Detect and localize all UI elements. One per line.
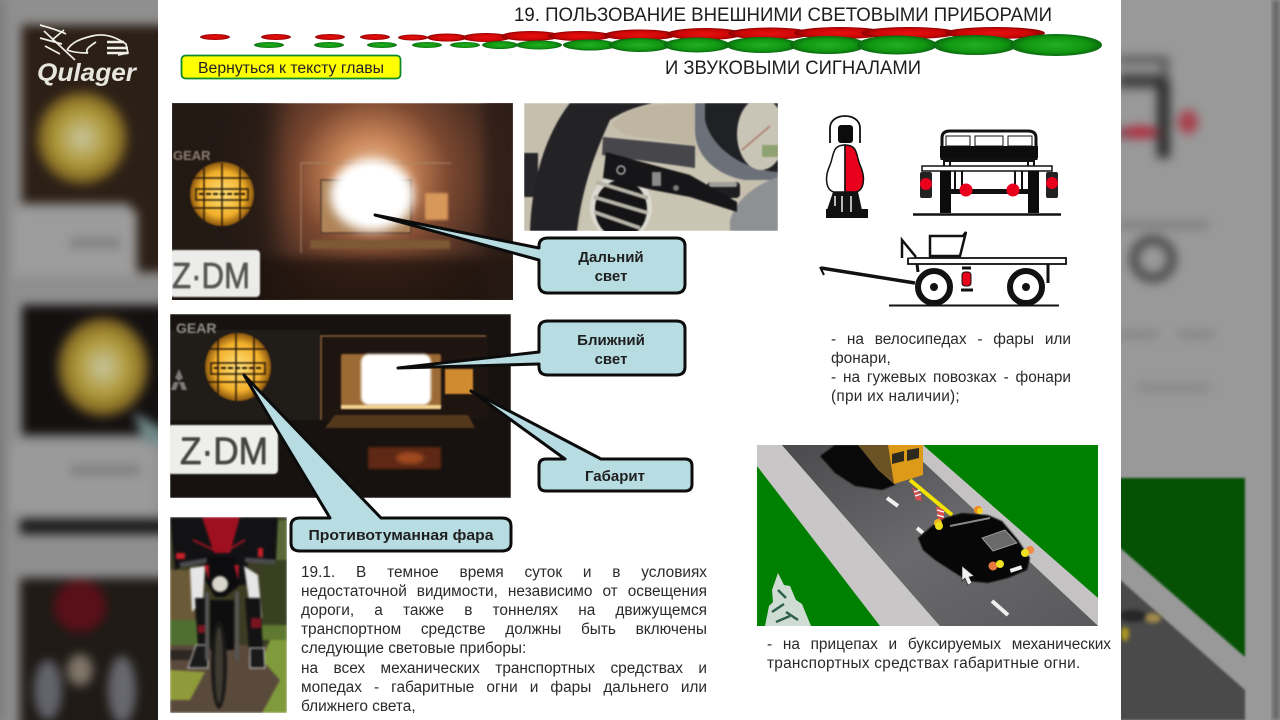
- vent: [590, 178, 652, 231]
- wheel spoke: [730, 177, 778, 231]
- road surface: [782, 445, 1098, 626]
- photo: high beam headlight: [172, 103, 513, 300]
- callout: low beam: Ближний: [577, 332, 645, 349]
- icon: car emblem: [40, 25, 128, 60]
- text block: trailers: транспортных средствах габаритные огни.: [767, 655, 1081, 672]
- bus shadow: [820, 445, 895, 490]
- button: back to chapter text: [182, 56, 400, 78]
- text block: rule 19.1: транспортном средстве должны быть включены: [301, 621, 707, 638]
- callout: side light: Габарит: [585, 468, 645, 485]
- callout: side light: [471, 391, 692, 491]
- legs dark: [193, 596, 264, 654]
- text block: rule 19.1: [301, 564, 707, 715]
- left sidewalk: [757, 445, 940, 626]
- lower dash panel: [580, 157, 735, 231]
- photo: steering column stalk: [524, 103, 778, 231]
- car: [918, 506, 1034, 583]
- callout: low beam: [398, 321, 685, 375]
- bus: [858, 445, 923, 484]
- fork and wheel: [207, 592, 237, 660]
- button: back to chapter text: Вернуться к тексту главы: [198, 60, 384, 77]
- text block: bicycles and carts: (при их наличии);: [831, 388, 960, 405]
- left blurred video strip: [0, 0, 172, 720]
- rider torso: [170, 517, 278, 585]
- callout: high beam: [375, 215, 685, 293]
- text block: rule 19.1: дороги, а также в тоннелях на движущемся: [301, 602, 707, 619]
- ribbon: red and green ovals: [200, 27, 1102, 56]
- text block: bicycles and carts: - на гужевых повозках - фонари: [831, 369, 1071, 386]
- title line 2: И ЗВУКОВЫМИ СИГНАЛАМИ: [665, 57, 921, 79]
- control knob: [707, 182, 740, 198]
- text block: rule 19.1: следующие световые приборы:: [301, 640, 526, 657]
- photo: towing vehicle on road: [757, 445, 1098, 626]
- cursor: [962, 566, 974, 585]
- tree: [765, 573, 811, 626]
- right sidewalk: [905, 445, 1098, 626]
- text block: trailers: - на прицепах и буксируемых механических: [767, 636, 1111, 653]
- photo: low beam headlight: Z·DM: [180, 431, 268, 473]
- instrument cluster: [695, 103, 778, 180]
- callout: low beam: свет: [595, 351, 627, 368]
- text block: rule 19.1: недостаточной видимости, независимо от освещения: [301, 583, 707, 600]
- callout: fog lamp: Противотуманная фара: [308, 527, 494, 544]
- drawing: trailer rear view: [913, 131, 1061, 214]
- drawing: kerosene lantern: [826, 116, 868, 218]
- steering wheel rim: [530, 103, 653, 231]
- boots: [188, 645, 265, 668]
- photo: low beam headlight: [168, 314, 511, 498]
- warning flags: [912, 487, 944, 520]
- callout: high beam: Дальний: [578, 249, 644, 266]
- stalk: [603, 152, 737, 212]
- handlebars: [180, 560, 275, 565]
- title line 1: 19. ПОЛЬЗОВАНИЕ ВНЕШНИМИ СВЕТОВЫМИ ПРИБОРАМИ: [514, 4, 1052, 26]
- fairing: [205, 557, 240, 597]
- callout: fog lamp: [244, 375, 511, 551]
- gray trim: [602, 137, 695, 168]
- right blurred video strip: [1118, 0, 1280, 720]
- lane dashes: [887, 498, 1008, 615]
- drawing: horse-drawn cart: [820, 232, 1066, 306]
- photo: low beam headlight: GEAR: [176, 320, 216, 336]
- logo: Qulager: Qulager: [37, 59, 137, 87]
- text block: bicycles and carts: - на велосипедах - фары или: [831, 331, 1071, 348]
- text block: rule 19.1: мопедах - габаритные огни и фары дальнего или: [301, 679, 707, 696]
- tow bar: [910, 480, 952, 515]
- text block: trailers: [767, 636, 1111, 672]
- photo: motorcycle rider: [170, 517, 287, 713]
- text block: bicycles and carts: фонари,: [831, 350, 891, 367]
- text block: rule 19.1: ближнего света,: [301, 698, 416, 715]
- callout: high beam: свет: [595, 268, 627, 285]
- photo: high beam headlight: GEAR: [173, 148, 211, 163]
- photo: high beam headlight: Z·DM: [172, 255, 250, 296]
- legs white: [190, 566, 262, 620]
- logo: Qulager: [37, 25, 137, 87]
- text block: rule 19.1: на всех механических транспортных средствах и: [301, 660, 707, 677]
- text block: bicycles and carts: [831, 331, 1071, 405]
- upper dash panel: [612, 103, 695, 145]
- page background: [158, 0, 1121, 720]
- text block: rule 19.1: 19.1. В темное время суток и в условиях: [301, 564, 707, 581]
